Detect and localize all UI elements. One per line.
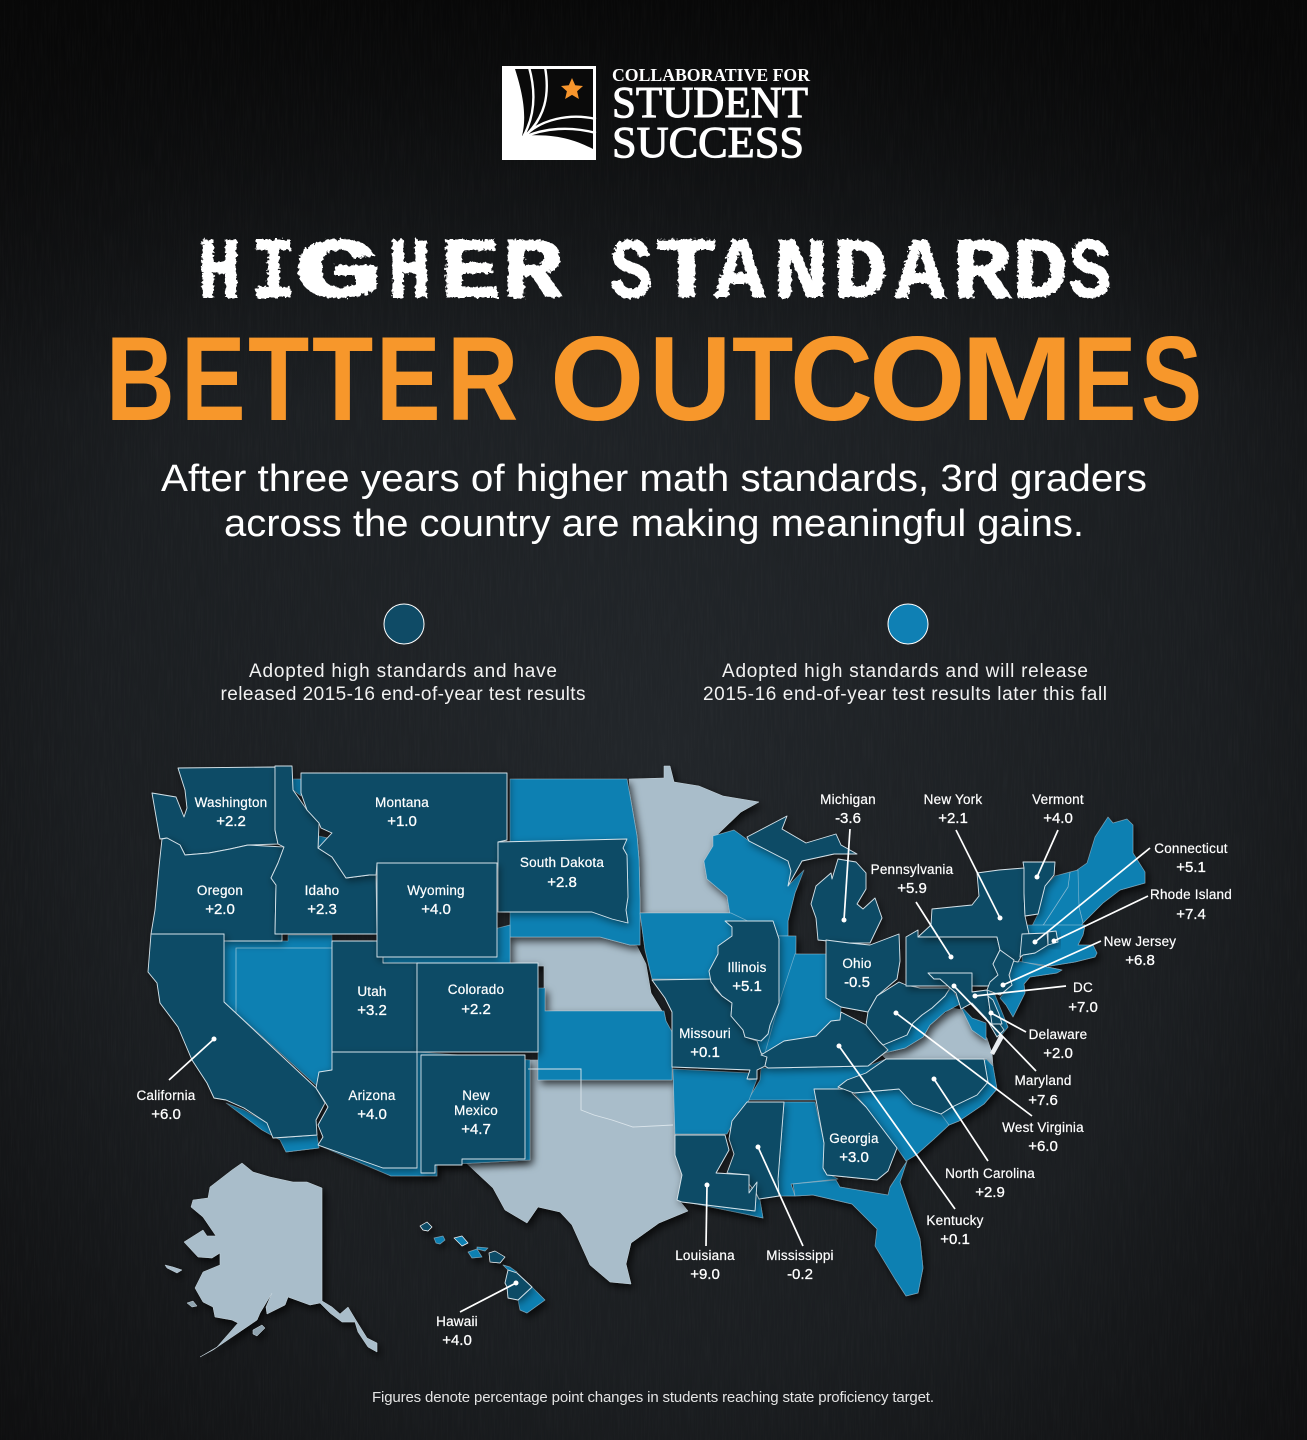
label: Connecticut: Connecticut xyxy=(1154,841,1228,856)
state: Florida xyxy=(793,1161,923,1296)
state: Hawaii islands xyxy=(420,1222,545,1313)
state: Texas and Oklahoma xyxy=(463,1060,688,1284)
title: Higher Standards: R xyxy=(952,225,1011,323)
title: Better Outcomes: E xyxy=(1073,312,1136,446)
state: New Jersey xyxy=(987,950,1014,995)
label: Utah: +3.2 xyxy=(357,1002,387,1019)
state: North Carolina coast base xyxy=(941,1059,997,1125)
label: Pennsylvania xyxy=(871,862,954,960)
label: Wyoming xyxy=(407,883,465,918)
label: Vermont xyxy=(1032,792,1084,880)
title: Higher Standards: R xyxy=(502,225,563,323)
label: Connecticut: +5.1 xyxy=(1176,859,1206,876)
label: New Jersey: New Jersey xyxy=(1104,934,1176,949)
title: Higher Standards: T xyxy=(655,225,718,323)
logo wordmark: STUDENT xyxy=(612,78,808,127)
label: Ohio xyxy=(842,956,872,991)
footnote: Figures denote percentage point changes in students reaching state proficiency target. xyxy=(372,1389,934,1406)
label: Michigan: -3.6 xyxy=(835,810,861,827)
label: Illinois: Illinois xyxy=(727,960,767,975)
state: Montana notch xyxy=(318,836,332,857)
state: Kansas xyxy=(538,988,672,1080)
subtitle: across the country are making meaningful gains. xyxy=(224,503,1084,545)
label: Maryland: Maryland xyxy=(1014,1073,1072,1088)
label: Oregon: +2.0 xyxy=(205,901,235,918)
state: North Dakota xyxy=(510,779,640,945)
title: Higher Standards: E xyxy=(440,225,501,323)
legend: released results xyxy=(220,604,586,705)
label: Washington: Washington xyxy=(195,795,267,810)
title: Higher Standards: A xyxy=(715,225,765,323)
title: Higher Standards: S xyxy=(610,225,652,323)
label: Wyoming: +4.0 xyxy=(421,901,451,918)
label: Vermont: Vermont xyxy=(1032,792,1084,807)
title: Higher Standards: A xyxy=(895,225,945,323)
label: Pennsylvania: Pennsylvania xyxy=(871,862,954,877)
state: West Virginia xyxy=(866,982,950,1045)
logo mark xyxy=(502,66,596,160)
label: Rhode Island xyxy=(1052,887,1232,944)
label: Kentucky xyxy=(836,1044,984,1248)
state: Tennessee xyxy=(748,1059,886,1100)
state: Arkansas xyxy=(673,1069,757,1134)
logo wordmark: SUCCESS xyxy=(612,118,804,167)
state: Michigan lower peninsula xyxy=(811,859,882,943)
label: Utah: Utah xyxy=(357,984,387,999)
state: Louisiana xyxy=(675,1135,757,1211)
label: Louisiana xyxy=(675,1182,735,1283)
state: Connecticut xyxy=(1020,933,1048,957)
logo wordmark xyxy=(612,65,810,167)
logo: Collaborative for Student Success xyxy=(502,65,810,167)
label: Delaware xyxy=(988,1010,1087,1062)
state: Michigan upper peninsula xyxy=(747,816,857,886)
state: Indiana xyxy=(765,954,841,1053)
state: Gulf coast base xyxy=(686,1182,763,1218)
label: Colorado: +2.2 xyxy=(461,1001,491,1018)
label: New Mexico: New xyxy=(462,1088,490,1103)
label: Mississippi: Mississippi xyxy=(766,1248,834,1263)
label: Delaware: +2.0 xyxy=(1043,1045,1073,1062)
label: Montana: +1.0 xyxy=(387,813,417,830)
state: Nevada and far-west base xyxy=(224,935,332,1088)
label: Missouri xyxy=(679,1026,731,1061)
title: Higher Standards: D xyxy=(1012,225,1068,323)
label: New York: New York xyxy=(924,792,982,807)
label: New Mexico xyxy=(454,1088,498,1138)
state: New Mexico xyxy=(421,1055,525,1173)
state: Southwest base xyxy=(226,1103,319,1152)
label: West Virginia: West Virginia xyxy=(1002,1120,1084,1135)
state: Ohio xyxy=(826,934,900,1012)
state: Utah xyxy=(332,941,417,1052)
state: Minnesota xyxy=(629,766,759,913)
Nevada inner border xyxy=(236,948,332,1013)
state: Nebraska xyxy=(510,937,662,1011)
thin Oklahoma border line xyxy=(528,1069,673,1127)
label: Hawaii xyxy=(436,1280,518,1349)
state: Alabama xyxy=(778,1102,838,1196)
label: West Virginia: +6.0 xyxy=(1028,1138,1058,1155)
label: DC: +7.0 xyxy=(1068,999,1098,1016)
state: Idaho xyxy=(271,766,377,934)
legend: later this fall: 2015-16 end-of-year test results later this fall xyxy=(703,684,1107,705)
title: Better Outcomes: M xyxy=(960,312,1074,446)
label: Illinois: +5.1 xyxy=(732,978,762,995)
title: Higher Standards: G xyxy=(293,225,383,323)
label: New Mexico: Mexico xyxy=(454,1103,498,1118)
label: South Dakota: South Dakota xyxy=(520,855,604,870)
grey states: no data xyxy=(165,766,993,1357)
label: Idaho xyxy=(305,883,339,918)
label: West Virginia xyxy=(894,1010,1084,1155)
label: Delaware: Delaware xyxy=(1029,1027,1087,1042)
label: California: California xyxy=(136,1088,196,1103)
state: Georgia xyxy=(814,1089,897,1180)
map of the United States xyxy=(148,766,1145,1357)
label: North Carolina: North Carolina xyxy=(945,1166,1035,1181)
label: Hawaii: +4.0 xyxy=(442,1332,472,1349)
label: Missouri: Missouri xyxy=(679,1026,731,1041)
label: Missouri: +0.1 xyxy=(690,1044,720,1061)
subtitle: After three years of higher math standards, 3rd graders xyxy=(161,458,1147,500)
label: Montana: Montana xyxy=(375,795,429,810)
label: Oregon xyxy=(197,883,243,918)
label: Georgia: Georgia xyxy=(829,1131,879,1146)
label: Hawaii: Hawaii xyxy=(436,1314,478,1329)
title: Better Outcomes: R xyxy=(447,312,518,446)
label: South Dakota: +2.8 xyxy=(547,874,577,891)
label: Mississippi xyxy=(756,1144,834,1283)
label: New York: +2.1 xyxy=(938,810,968,827)
label: Michigan xyxy=(820,792,876,922)
state: Rhode Island xyxy=(1048,931,1058,945)
Delmarva wedge xyxy=(990,1034,1004,1055)
state: Washington xyxy=(152,767,278,855)
title: Higher Standards: H xyxy=(388,225,431,323)
state: Virginia xyxy=(880,1008,993,1066)
title: Higher Standards: D xyxy=(833,225,888,323)
label: Washington xyxy=(195,795,267,830)
logo wordmark: COLLABORATIVE FOR xyxy=(612,65,810,85)
label: Utah xyxy=(357,984,387,1019)
state: Montana xyxy=(301,773,507,878)
title: Higher Standards xyxy=(198,225,1111,323)
title: Better Outcomes: T xyxy=(248,312,309,446)
legend: later this fall: Adopted high standards and will release xyxy=(722,661,1088,682)
label: Kentucky: +0.1 xyxy=(940,1231,970,1248)
legend: later this fall xyxy=(703,604,1107,705)
label: Rhode Island: +7.4 xyxy=(1176,906,1206,923)
label: New York xyxy=(924,792,1002,920)
label: Pennsylvania: +5.9 xyxy=(897,880,927,897)
state: California xyxy=(148,934,325,1138)
label: Colorado xyxy=(448,982,504,1018)
label: Oregon: Oregon xyxy=(197,883,243,898)
state: Delaware xyxy=(988,996,1002,1024)
title: Higher Standards: I xyxy=(251,225,296,323)
label: Louisiana: +9.0 xyxy=(690,1266,720,1283)
blue states: results later this fall xyxy=(224,779,1145,1313)
state: Wyoming xyxy=(377,863,497,957)
label: California: +6.0 xyxy=(151,1106,181,1123)
label: Arizona: +4.0 xyxy=(357,1106,387,1123)
label: Idaho: +2.3 xyxy=(307,901,337,918)
label: Ohio: Ohio xyxy=(842,956,872,971)
label: Michigan: Michigan xyxy=(820,792,876,807)
state: North Carolina xyxy=(838,1059,988,1114)
title: Better Outcomes: S xyxy=(1141,312,1202,446)
state: Wisconsin xyxy=(704,830,804,936)
state: Vermont xyxy=(1023,862,1055,916)
state: Arizona and New Mexico base xyxy=(318,1052,530,1176)
label: Connecticut xyxy=(1032,841,1228,944)
state: Hawaii big island xyxy=(505,1270,532,1300)
title: Higher Standards: H xyxy=(198,225,241,323)
legend: released results: Adopted high standards and have xyxy=(249,661,557,682)
legend: released results: released 2015-16 end-of-year test results xyxy=(220,684,586,705)
label: North Carolina xyxy=(932,1076,1035,1201)
label: Louisiana: Louisiana xyxy=(675,1248,735,1263)
label: Arizona: Arizona xyxy=(348,1088,396,1103)
state: Wyoming base xyxy=(382,925,510,978)
state: West Virginia shore xyxy=(879,988,960,1053)
label: Vermont: +4.0 xyxy=(1043,810,1073,827)
title: Better Outcomes: T xyxy=(732,312,793,446)
state: Mississippi xyxy=(727,1102,784,1199)
state: Colorado xyxy=(417,963,538,1052)
title: Better Outcomes: O xyxy=(550,312,644,446)
state: Arizona xyxy=(316,1052,417,1168)
label: Illinois xyxy=(727,960,767,995)
label: Georgia xyxy=(829,1131,879,1166)
label: Kentucky: Kentucky xyxy=(926,1213,984,1228)
state: Chesapeake shore xyxy=(960,1005,986,1040)
state: Pennsylvania xyxy=(906,930,1000,986)
state: Maryland xyxy=(928,973,1004,1037)
label: New Jersey xyxy=(1000,934,1176,988)
title: Higher Standards: S xyxy=(1069,225,1111,323)
label: Idaho: Idaho xyxy=(305,883,339,898)
state: coastal mid-Atlantic xyxy=(1000,960,1062,1017)
state: Delmarva shore xyxy=(987,990,1008,1037)
label: Mississippi: -0.2 xyxy=(787,1266,813,1283)
subtitle xyxy=(161,458,1147,545)
label: Maryland: +7.6 xyxy=(1028,1092,1058,1109)
state: Oregon xyxy=(151,838,284,941)
state: Northwest base xyxy=(292,779,301,796)
label: Georgia: +3.0 xyxy=(839,1149,869,1166)
dark states: results released xyxy=(148,766,1058,1300)
label: Wyoming: Wyoming xyxy=(407,883,465,898)
state: South Carolina xyxy=(854,1089,949,1161)
label: New Jersey: +6.8 xyxy=(1125,952,1155,969)
state: Missouri xyxy=(652,979,767,1079)
label: Rhode Island: Rhode Island xyxy=(1150,887,1232,902)
label: Colorado: Colorado xyxy=(448,982,504,997)
label: South Dakota xyxy=(520,855,604,891)
label: Montana xyxy=(375,795,429,830)
title: Better Outcomes: U xyxy=(649,312,732,446)
title: Better Outcomes: T xyxy=(312,312,373,446)
label: DC xyxy=(972,980,1098,1016)
state: New Hampshire xyxy=(1040,870,1083,932)
label: Washington: +2.2 xyxy=(216,813,246,830)
state: Massachusetts xyxy=(1022,925,1097,966)
title: Better Outcomes: C xyxy=(790,312,873,446)
title: Better Outcomes xyxy=(106,312,1202,446)
state: Iowa xyxy=(640,913,796,1060)
label: DC: DC xyxy=(1073,980,1093,995)
label: California xyxy=(136,1036,216,1123)
state: Alaska xyxy=(184,1163,377,1357)
label: New Mexico: +4.7 xyxy=(461,1121,491,1138)
label: Ohio: -0.5 xyxy=(844,974,870,991)
label: Arizona xyxy=(348,1088,396,1123)
title: Better Outcomes: E xyxy=(376,312,441,446)
state: South Dakota xyxy=(498,839,628,923)
state: Northeast strip xyxy=(1030,872,1070,930)
state: Kentucky xyxy=(761,1012,888,1068)
state: New York xyxy=(918,868,1029,962)
state labels and leader lines xyxy=(136,792,1232,1349)
state: Maine xyxy=(1077,817,1145,923)
label: North Carolina: +2.9 xyxy=(975,1184,1005,1201)
title: Higher Standards: N xyxy=(773,225,829,323)
title: Better Outcomes: O xyxy=(869,312,966,446)
title: Better Outcomes: B xyxy=(106,312,175,446)
title: Better Outcomes: E xyxy=(181,312,246,446)
state: Alaska islands xyxy=(165,1265,265,1336)
state: Illinois xyxy=(709,921,779,1041)
label: Maryland xyxy=(952,984,1072,1109)
